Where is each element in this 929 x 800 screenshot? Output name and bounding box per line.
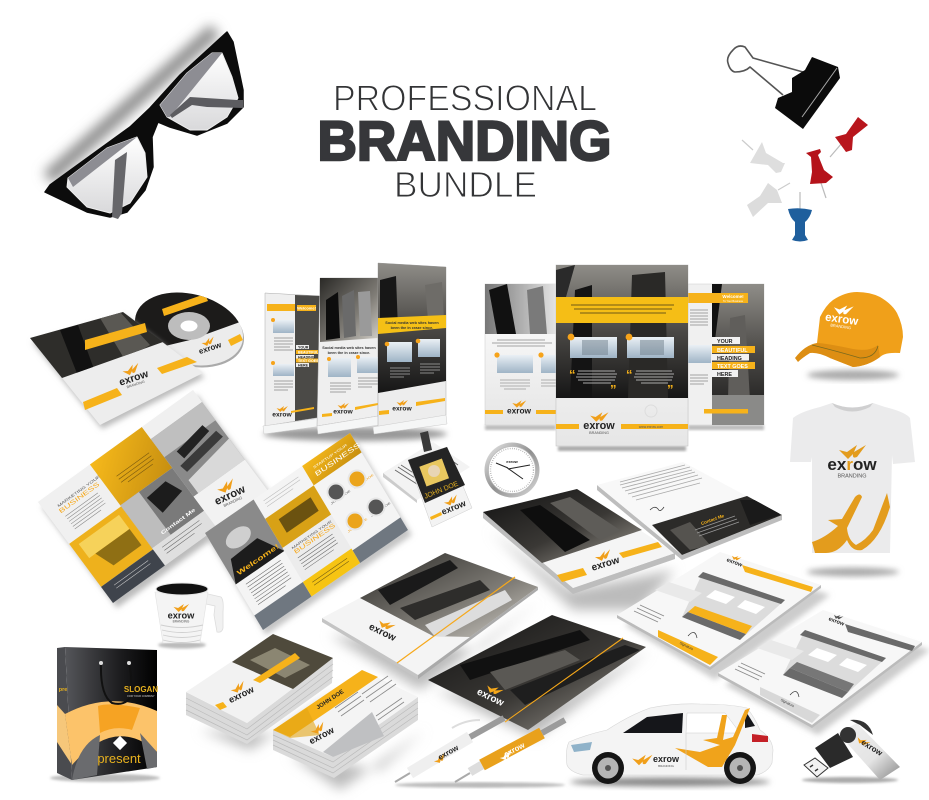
usb flash drive xyxy=(802,720,900,783)
flyer: right: Welcome! xyxy=(722,294,744,299)
banner: right: Social media web sites haven xyxy=(385,321,439,325)
flyer: center: ” xyxy=(667,382,674,397)
panel: business text xyxy=(38,463,123,544)
pin: red 2 xyxy=(806,149,833,198)
banner: right: been the in craze since. xyxy=(391,326,433,330)
invoice: grey xyxy=(718,610,929,735)
notepad logo xyxy=(588,548,621,574)
shirt logo xyxy=(827,445,877,480)
flyer logo: exrow xyxy=(507,405,532,415)
banner heading labels: HEADING xyxy=(298,355,315,359)
panel: team names: JOHN DOE xyxy=(330,489,352,505)
card logo xyxy=(224,678,256,705)
panel: yellow quote xyxy=(90,427,172,505)
car logo xyxy=(632,754,680,768)
CD logo: exrow xyxy=(198,340,223,356)
flyer: center: ” xyxy=(610,382,616,397)
panel: business text: BUSINESS xyxy=(293,521,337,555)
panel: startup header: BUSINESS xyxy=(314,441,361,478)
panel: business text: MARKETING YOUR xyxy=(291,520,332,550)
usb connector xyxy=(804,758,828,777)
folder: dark xyxy=(428,615,650,738)
shirt swoosh graphic xyxy=(812,493,890,553)
title line: BRANDING: BRANDING xyxy=(318,109,612,172)
sleeve logo: exrow xyxy=(118,369,151,389)
panel: startup header xyxy=(302,432,364,485)
car xyxy=(566,704,773,786)
panel: business text: MARKETING YOUR xyxy=(57,474,102,509)
folder logo: exrow xyxy=(475,687,506,709)
business cards: stack 2: JOHN DOE xyxy=(316,689,345,711)
pin: white 2 xyxy=(747,183,790,217)
panel: team names xyxy=(326,473,408,563)
baseball cap xyxy=(795,292,903,380)
panel: welcome photo xyxy=(205,500,284,584)
banner heading labels: TEXT GOES xyxy=(298,359,319,363)
pin: blue xyxy=(788,192,812,242)
flyer heading labels: HERE xyxy=(717,372,732,378)
CD disc xyxy=(135,292,244,368)
panel: man photo xyxy=(120,468,204,548)
roll-up banners xyxy=(263,263,447,441)
panel: logo xyxy=(194,460,268,528)
trifold brochure: right xyxy=(205,432,412,635)
flyer heading labels: YOUR xyxy=(717,339,733,345)
flyer heading labels: TEXT GOES xyxy=(717,364,748,370)
panel: contact text xyxy=(152,511,217,565)
id badge with paper stack: JOHN DOE xyxy=(423,480,460,501)
usb logo: exrow xyxy=(860,738,885,758)
car wheels xyxy=(592,752,756,784)
flyer: left xyxy=(485,284,556,430)
pen logo: exrow xyxy=(502,740,526,759)
invoice logo xyxy=(828,612,847,628)
invoice logo: exrow xyxy=(726,557,743,569)
card logo: exrow xyxy=(307,724,336,746)
panel: business text xyxy=(283,514,360,596)
flyer heading labels: BEAUTIFUL xyxy=(717,348,748,354)
panel: man photo: Contact Me xyxy=(160,507,197,536)
mug logo: exrow xyxy=(168,610,195,620)
notepad logo: exrow xyxy=(590,555,621,574)
mug xyxy=(155,583,223,648)
invoice table xyxy=(655,572,785,640)
invoice logo: exrow xyxy=(828,616,845,628)
CD with sleeve xyxy=(30,292,244,431)
panel: welcome photo: Welcome! xyxy=(236,542,280,577)
brochure logo xyxy=(209,476,249,511)
flyer: center: www.exrow.com xyxy=(639,425,663,429)
bag rope handle xyxy=(101,663,131,704)
bag front panel: FOR YOUR COMPANY xyxy=(127,694,155,698)
usb body xyxy=(815,733,853,768)
flyer logo: BRANDING xyxy=(589,431,609,435)
bag front panel xyxy=(65,647,158,780)
cap logo xyxy=(824,303,860,331)
wall clock: exrow xyxy=(506,459,519,464)
banner: left xyxy=(263,293,322,434)
brochure logo: exrow xyxy=(213,483,248,508)
banner: left: Welcome! xyxy=(297,306,316,310)
badge logo: exrow xyxy=(440,498,467,517)
banner: right xyxy=(373,263,447,434)
wall clock xyxy=(484,442,540,498)
letterhead stack: Contact Me xyxy=(700,513,725,526)
car windows xyxy=(623,713,683,733)
flyer heading labels: HEADING xyxy=(717,356,742,362)
banner heading labels: YOUR xyxy=(298,345,309,349)
invoice table xyxy=(757,630,886,698)
car logo: exrow xyxy=(653,754,680,764)
card logo xyxy=(304,719,336,746)
flyer logo: exrow xyxy=(583,420,615,432)
pen logo: exrow xyxy=(436,743,460,762)
business cards: stack 1 xyxy=(186,634,340,750)
flyer logo xyxy=(583,412,615,435)
panel: team names: JOHN DOE xyxy=(370,501,392,517)
car logo: BRANDING xyxy=(658,764,675,768)
flyer: right: To Your Business xyxy=(723,299,744,303)
notepad xyxy=(483,489,675,610)
usb swivel xyxy=(838,723,900,780)
flyers xyxy=(485,265,764,451)
letterhead stack xyxy=(597,462,782,560)
banner logo xyxy=(272,406,292,419)
icon: eyeglasses xyxy=(45,30,243,219)
shirt logo: exrow xyxy=(827,455,877,474)
banner logo: exrow xyxy=(392,406,412,413)
paper stack xyxy=(383,442,470,503)
pen: yellow xyxy=(455,720,565,788)
folder: white xyxy=(322,553,540,690)
title line: BUNDLE: BUNDLE xyxy=(394,164,537,205)
panel: text xyxy=(239,556,312,630)
panel: team names: JOHN DOE xyxy=(353,473,375,489)
trifold brochure: left xyxy=(38,390,272,608)
business cards: stack 2 xyxy=(273,670,425,790)
pin: white 1 xyxy=(742,140,785,173)
pen: white xyxy=(395,718,505,788)
banner: middle xyxy=(317,278,379,434)
team portraits xyxy=(326,470,386,530)
invoice: grey: Signature xyxy=(780,698,795,708)
folder logo xyxy=(475,680,509,709)
panel: building photo xyxy=(142,390,245,497)
flyer: right xyxy=(688,284,764,430)
banner: middle: been the in craze since. xyxy=(328,351,370,355)
panel: yellow office xyxy=(69,506,165,603)
invoice logo xyxy=(726,553,745,569)
t-shirt xyxy=(790,403,915,576)
panel: yellow photo xyxy=(257,472,331,548)
sleeve logo: BRANDING xyxy=(126,380,145,389)
brochure logo: BRANDING xyxy=(223,496,243,508)
flyer: center xyxy=(556,265,688,451)
mug logo xyxy=(168,604,195,624)
shopping bag xyxy=(50,647,160,782)
invoice: yellow xyxy=(617,552,830,680)
flyer logo xyxy=(507,400,532,415)
shirt logo: BRANDING xyxy=(837,474,867,480)
id badge with paper stack xyxy=(383,431,472,527)
icon: binder clip xyxy=(728,46,840,129)
CD sleeve xyxy=(30,312,205,429)
banner heading labels: HERE xyxy=(298,363,309,367)
title xyxy=(318,78,612,205)
panel: business text: BUSINESS xyxy=(58,480,101,515)
banner: middle: Social media web sites haven xyxy=(322,346,376,350)
flyer heading labels xyxy=(712,337,755,378)
invoice: yellow: Signature xyxy=(679,641,694,651)
banner logo xyxy=(392,400,412,413)
cap logo: BRANDING xyxy=(830,322,851,330)
car swoosh graphic xyxy=(675,708,750,767)
banner logo xyxy=(333,403,353,416)
folder logo: exrow xyxy=(367,622,398,644)
mug logo: BRANDING xyxy=(173,620,190,624)
pin: red 1 xyxy=(830,117,868,157)
card logo: exrow xyxy=(227,684,256,705)
banner logo: exrow xyxy=(272,412,292,419)
banner heading labels: BEAUTIFUL xyxy=(298,350,319,354)
title line: PROFESSIONAL: PROFESSIONAL xyxy=(333,78,597,118)
cap logo: exrow xyxy=(824,312,859,328)
icon: push pins xyxy=(742,117,868,242)
bag front panel: present xyxy=(97,751,141,766)
panel: team names: JOHN DOE xyxy=(347,517,368,533)
flyer: center: “ xyxy=(569,367,576,382)
bag side panel: pre xyxy=(59,687,67,693)
sleeve logo xyxy=(115,361,151,391)
banner logo: exrow xyxy=(333,409,353,416)
folder logo xyxy=(367,615,401,644)
flyer: center: “ xyxy=(626,367,632,382)
bag front panel: SLOGAN xyxy=(124,685,158,694)
panel: startup header: STARTUP YOUR xyxy=(312,443,348,469)
banner heading labels xyxy=(296,345,319,367)
